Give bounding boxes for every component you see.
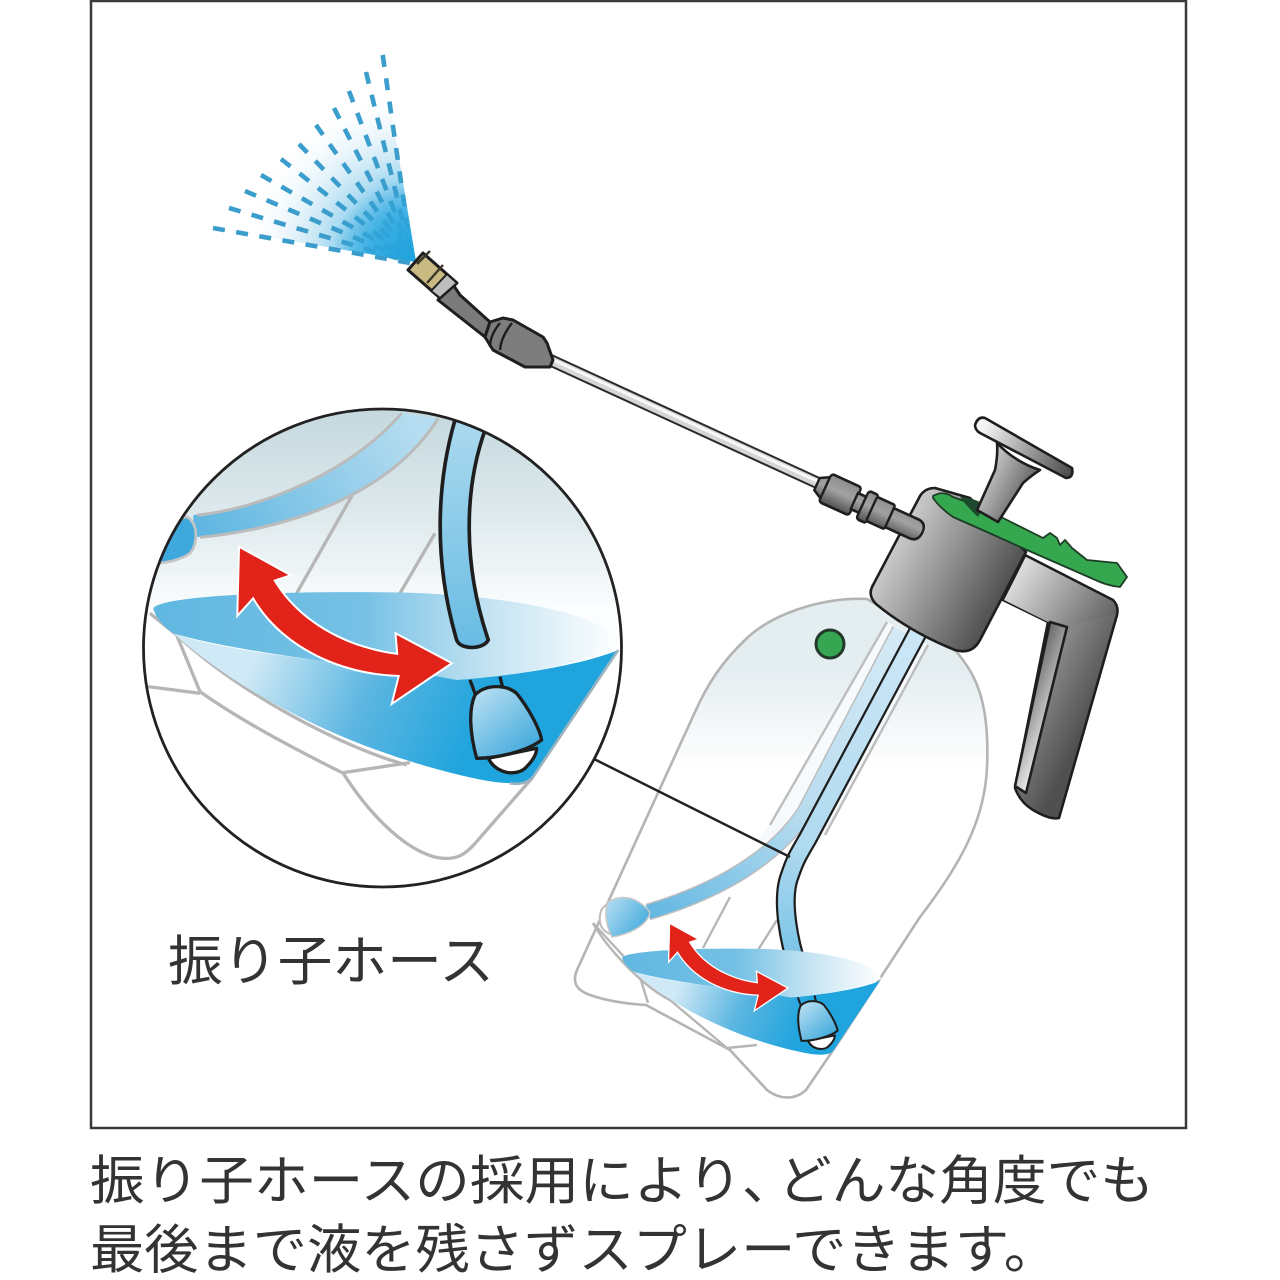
label: swing hose: 振り子ホース (168, 932, 494, 992)
water body (173, 633, 618, 783)
icon: water spray fan (213, 55, 416, 263)
caption text: 、 (742, 1152, 795, 1211)
green pump collar (933, 493, 1127, 587)
handle (1003, 555, 1118, 818)
nozzle (408, 251, 553, 367)
caption text (90, 1152, 1154, 1280)
swing arrow (669, 924, 787, 1009)
ghost weight (160, 517, 196, 563)
swing arrow (238, 548, 450, 702)
fixed outer tube (760, 622, 928, 840)
magnifier ring (144, 409, 622, 887)
water surface (622, 949, 881, 997)
magnifier background (151, 410, 614, 596)
ghost hose weight (600, 897, 650, 937)
hose end (440, 420, 488, 647)
plunger (975, 418, 1072, 522)
white lower bottle area (140, 607, 633, 900)
wand tube (550, 358, 820, 484)
hose weight (798, 996, 838, 1049)
outer frame (91, 1, 1186, 1128)
wand connector (811, 470, 929, 546)
caption text: 振り子ホースの採用により (90, 1152, 742, 1211)
caption text: どんな角度でも (778, 1152, 1154, 1211)
water body (633, 972, 880, 1055)
leader line (594, 759, 790, 857)
water and weight in bottle (622, 924, 881, 1055)
ghost hose (193, 413, 438, 537)
swing position ghost hose (648, 630, 900, 912)
main suction hose (786, 632, 918, 968)
hose weight (470, 677, 542, 773)
icon: green dot on bottle (816, 630, 844, 658)
panel: magnifier detail of swing hose (140, 405, 633, 900)
caption text: 最後まで液を残さずスプレーできます。 (90, 1221, 1058, 1280)
water surface (153, 592, 620, 680)
pump head cylinder (871, 488, 1026, 651)
fixed outer tube edges (770, 622, 928, 835)
bottle outline and interior (575, 599, 987, 1098)
bottle inner lines (148, 493, 533, 858)
